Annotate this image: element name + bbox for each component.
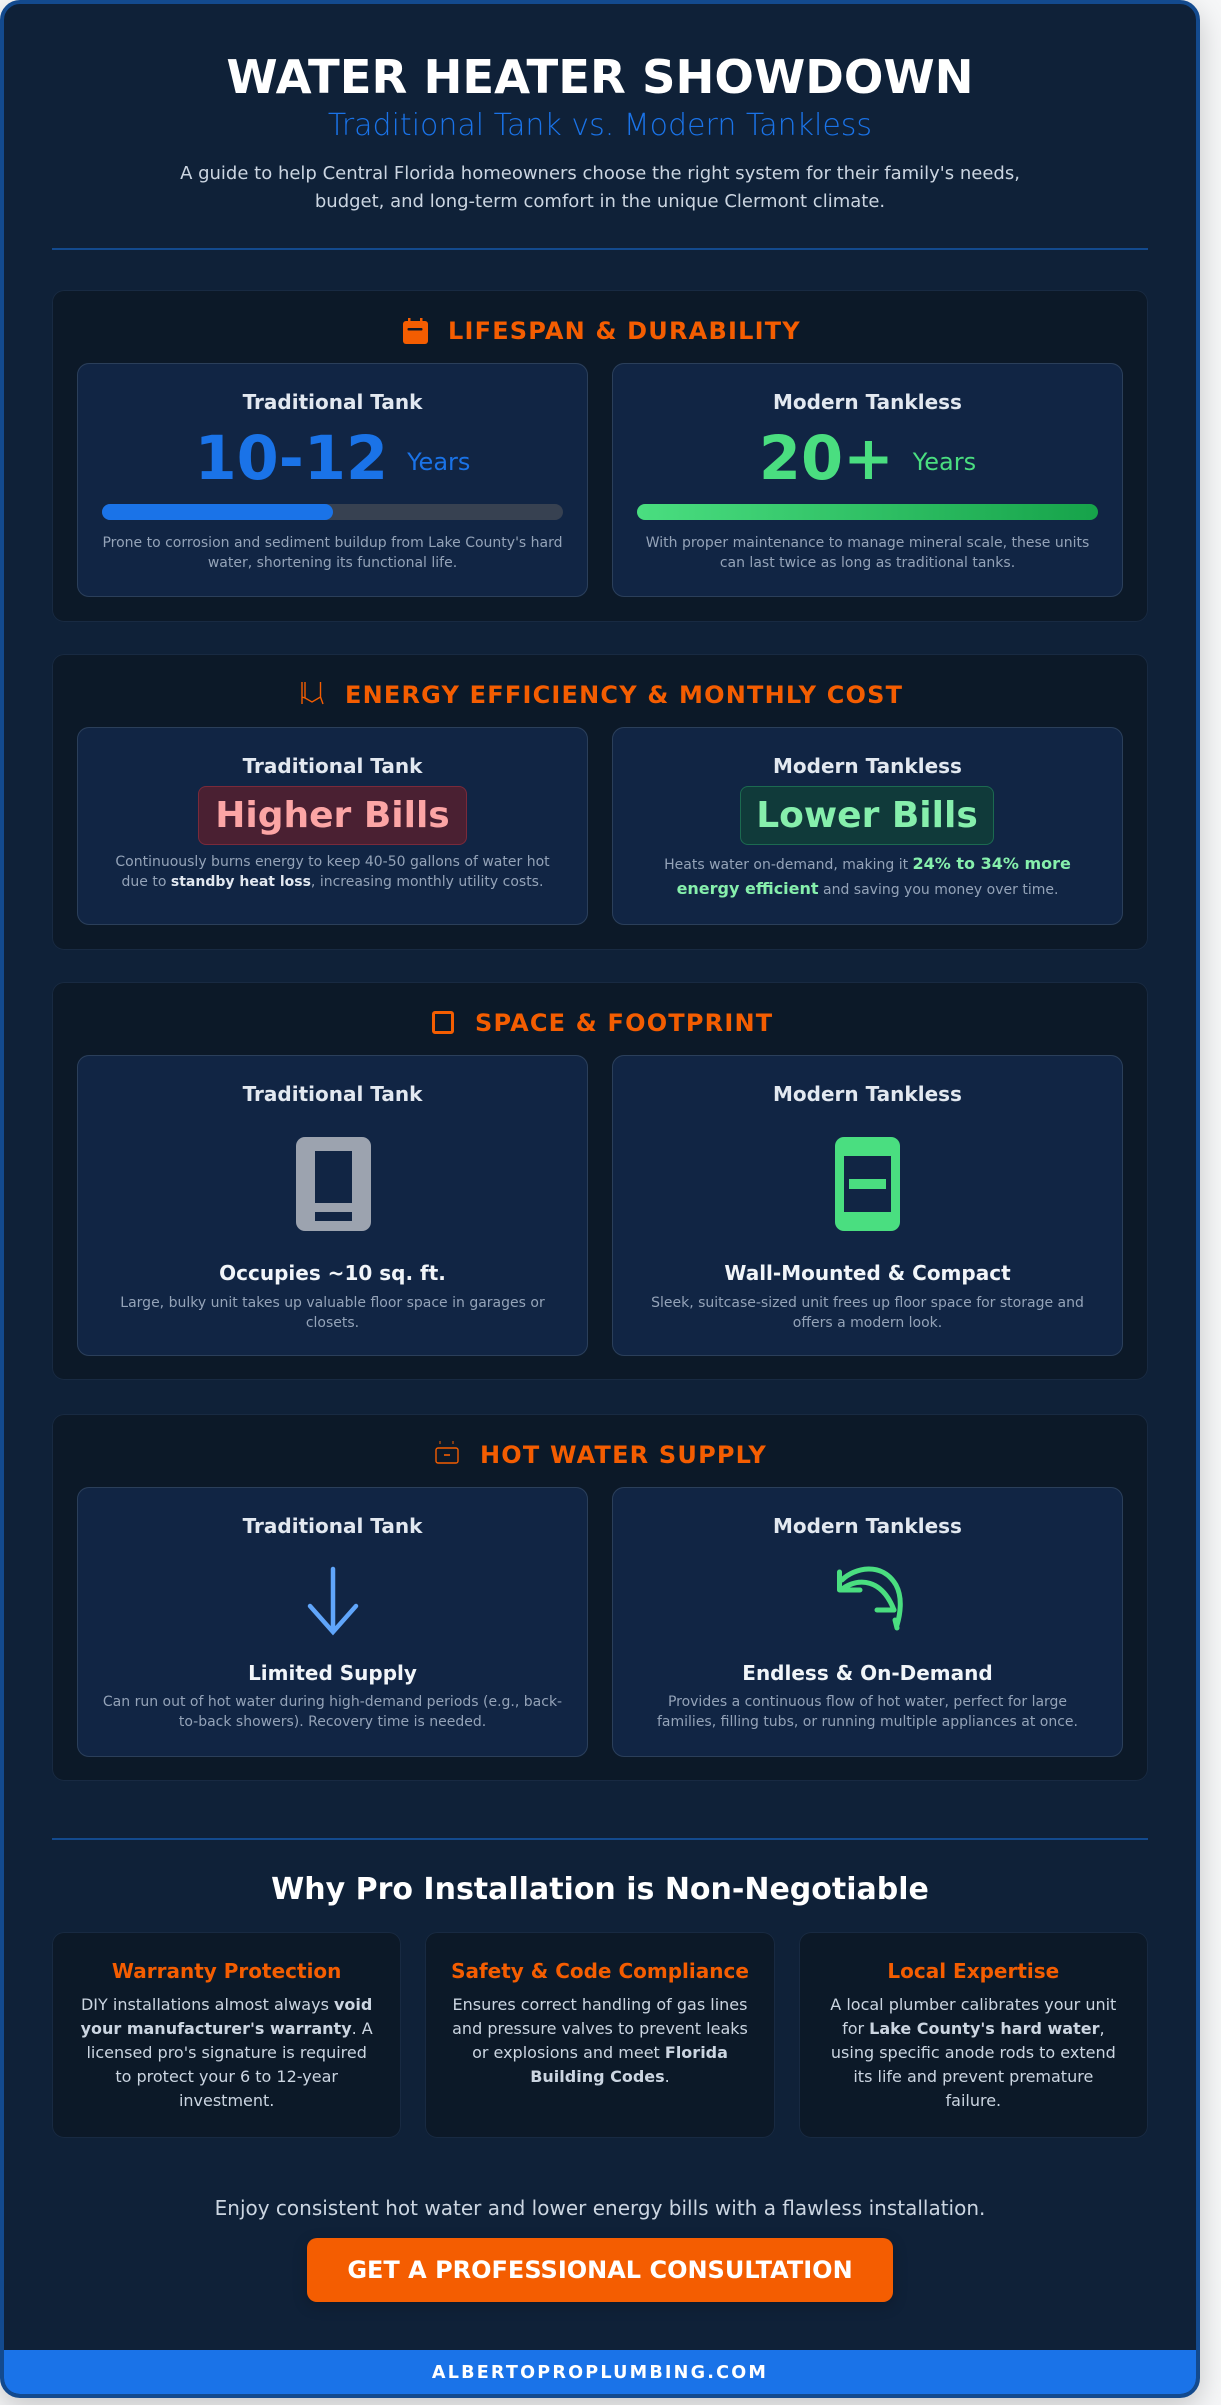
intro text (180, 163, 1020, 212)
header (180, 50, 1020, 212)
description: Continuously burns energy to keep 40-50 gallons of water hot (115, 854, 550, 870)
card text: for Lake County's hard water, (842, 2019, 1105, 2038)
card text: failure. (946, 2091, 1001, 2110)
card heading: Local Expertise (887, 1959, 1059, 1983)
card: tankless energy (612, 727, 1123, 925)
heading: supply: HOT WATER SUPPLY (480, 1441, 767, 1469)
label: Endless & On-Demand (742, 1661, 993, 1685)
icon: water heater (435, 1441, 459, 1464)
card: tankless supply (612, 1487, 1123, 1757)
description: offers a modern look. (793, 1315, 942, 1331)
card: traditional lifespan (77, 363, 588, 597)
description: With proper maintenance to manage mineral scale, these units (646, 535, 1089, 551)
description: energy efficient and saving you money over time. (677, 879, 1058, 898)
panel: energy efficiency (52, 654, 1148, 950)
description: water, shortening its functional life. (208, 555, 457, 571)
card title: Traditional Tank (243, 1082, 422, 1106)
card text (452, 1995, 748, 2086)
label: Wall-Mounted & Compact (724, 1261, 1011, 1285)
badge: higher bills: Higher Bills (215, 795, 450, 836)
icon: down arrow (308, 1566, 358, 1636)
description: Sleek, suitcase-sized unit frees up floor space for storage and (651, 1295, 1084, 1311)
card text: your manufacturer's warranty. A (81, 2019, 373, 2038)
icon: energy chart (301, 682, 324, 704)
card heading: Warranty Protection (112, 1959, 341, 1983)
card title: Traditional Tank (243, 390, 422, 414)
card text (830, 1995, 1116, 2110)
icon: continuous flow arrows (837, 1566, 903, 1630)
section heading: why pro installation: Why Pro Installation is Non-Negotiable (271, 1872, 929, 1907)
description (664, 854, 1071, 898)
badge: lower bills: Lower Bills (756, 795, 978, 836)
card: traditional space (77, 1055, 588, 1356)
icon: calendar (403, 318, 428, 344)
card heading: Safety & Code Compliance (451, 1959, 749, 1983)
description: Provides a continuous flow of hot water, perfect for large (668, 1694, 1067, 1710)
heading: space: SPACE & FOOTPRINT (475, 1009, 773, 1037)
description (657, 1694, 1078, 1730)
card title: Traditional Tank (243, 754, 422, 778)
description: closets. (306, 1315, 359, 1331)
call to action button (307, 2238, 893, 2302)
card title: Traditional Tank (243, 1514, 422, 1538)
card text: its life and prevent premature (853, 2067, 1093, 2086)
label: Occupies ~10 sq. ft. (219, 1261, 446, 1285)
card text: investment. (179, 2091, 274, 2110)
panel: lifespan and durability (52, 290, 1148, 622)
description: Prone to corrosion and sediment buildup from Lake County's hard (102, 535, 563, 551)
heading: lifespan: LIFESPAN & DURABILITY (448, 317, 801, 345)
card text: DIY installations almost always void (81, 1995, 372, 2014)
description: Large, bulky unit takes up valuable floor space in garages or (120, 1295, 545, 1311)
card: traditional energy (77, 727, 588, 925)
description: Can run out of hot water during high-demand periods (e.g., back- (103, 1694, 562, 1710)
intro text: A guide to help Central Florida homeowners choose the right system for their family's needs, (180, 163, 1020, 184)
intro text: budget, and long-term comfort in the unique Clermont climate. (315, 191, 885, 212)
progress bar (102, 504, 563, 520)
progress bar (637, 504, 1098, 520)
icon: footprint square (432, 1011, 454, 1034)
card: tankless space (612, 1055, 1123, 1356)
card: tankless lifespan (612, 363, 1123, 597)
card: traditional supply (77, 1487, 588, 1757)
badge: higher bills (198, 786, 467, 845)
card title: Modern Tankless (773, 390, 962, 414)
card title: Modern Tankless (773, 754, 962, 778)
call to action button: GET A PROFESSIONAL CONSULTATION (347, 2256, 853, 2284)
card text (80, 1995, 373, 2110)
footer bar: ALBERTOPROPLUMBING.COM (432, 2363, 768, 2383)
card text: using specific anode rods to extend (831, 2043, 1116, 2062)
stat: 10-12 years: 10-12 Years (195, 424, 470, 494)
description (102, 535, 563, 571)
description (646, 535, 1089, 571)
card text: to protect your 6 to 12-year (115, 2067, 338, 2086)
description (103, 1694, 562, 1730)
description: Heats water on-demand, making it 24% to 34% more (664, 854, 1071, 873)
panel: hot water supply (52, 1414, 1148, 1781)
icon: compact unit (835, 1137, 900, 1231)
closing text: Enjoy consistent hot water and lower energy bills with a flawless installation. (215, 2196, 985, 2220)
heading: energy: ENERGY EFFICIENCY & MONTHLY COST (345, 681, 903, 709)
card text: or explosions and meet Florida (472, 2043, 728, 2062)
panel: space and footprint (52, 982, 1148, 1380)
card text: and pressure valves to prevent leaks (452, 2019, 748, 2038)
description: families, filling tubs, or running multiple appliances at once. (657, 1714, 1078, 1730)
badge: lower bills (740, 786, 994, 845)
card text: licensed pro's signature is required (86, 2043, 367, 2062)
card text: A local plumber calibrates your unit (830, 1995, 1116, 2014)
card text: Ensures correct handling of gas lines (453, 1995, 747, 2014)
description: to-back showers). Recovery time is needed. (179, 1714, 486, 1730)
description (651, 1295, 1084, 1331)
panel: local expertise (799, 1932, 1148, 2138)
stat: 20+ years: 20+ Years (759, 424, 976, 494)
panel: warranty protection (52, 1932, 401, 2138)
description: due to standby heat loss, increasing monthly utility costs. (122, 874, 543, 890)
card text: Building Codes. (530, 2067, 670, 2086)
title: WATER HEATER SHOWDOWN (226, 50, 974, 104)
footer bar (4, 2350, 1196, 2394)
subtitle: Traditional Tank vs. Modern Tankless (328, 108, 872, 143)
card title: Modern Tankless (773, 1082, 962, 1106)
icon: bulky tank (296, 1137, 371, 1231)
label: Limited Supply (248, 1661, 417, 1685)
card title: Modern Tankless (773, 1514, 962, 1538)
description (120, 1295, 545, 1331)
panel: safety and code compliance (425, 1932, 775, 2138)
description (115, 854, 550, 890)
description: can last twice as long as traditional tanks. (720, 555, 1015, 571)
